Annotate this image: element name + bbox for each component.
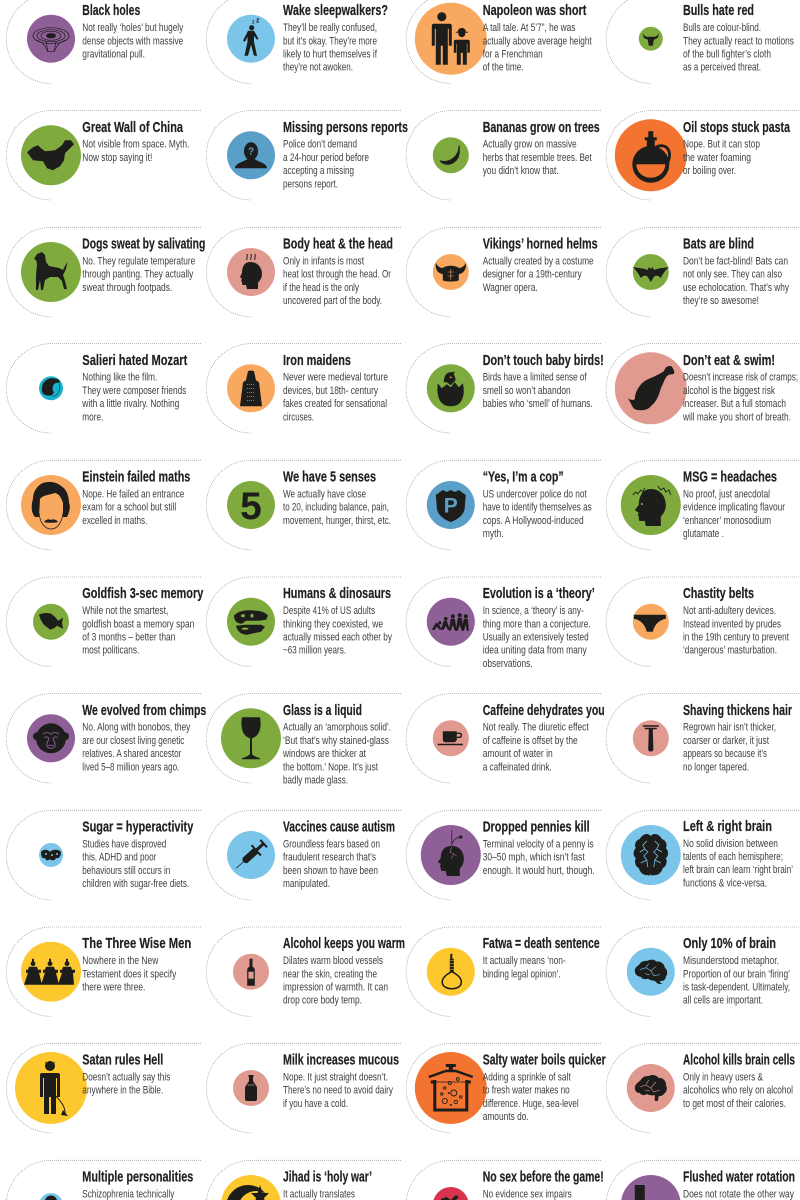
text block: glutamate .	[683, 528, 724, 540]
icon: milk bottle	[233, 1070, 269, 1106]
icon: faces	[39, 1193, 63, 1200]
text block: They’ll be really confused,	[283, 22, 377, 34]
icon: syringe	[227, 831, 275, 879]
icon: sleepwalker: z	[256, 18, 260, 25]
text block: Groundless fears based on	[283, 838, 380, 850]
text block: excelled in maths.	[82, 515, 147, 527]
title: Evolution is a ‘theory’	[483, 586, 595, 602]
text block: Testament does it specify	[82, 968, 177, 980]
title: The Three Wise Men	[82, 936, 191, 952]
card: Shaving thickens hair	[606, 694, 800, 783]
card: MSG = headaches	[606, 460, 800, 550]
icon: Mozart wig	[39, 376, 63, 400]
icon: three wise men	[21, 942, 81, 1002]
text block: babies who ‘smell’ of humans.	[483, 398, 593, 410]
icon: sleepwalker	[227, 15, 275, 63]
text block: this. ADHD and poor	[82, 852, 157, 864]
icon: chicken leg	[615, 352, 687, 424]
text block: accepting a missing	[283, 165, 354, 177]
title: Goldfish 3-sec memory	[82, 586, 204, 602]
text block: to 20, including balance, pain,	[283, 502, 389, 514]
text block: binding legal opinion’.	[483, 968, 561, 980]
text block	[683, 255, 789, 307]
text block	[483, 488, 592, 540]
text block: ‘But that’s why stained-glass	[283, 735, 389, 747]
text block: persons report.	[283, 178, 338, 190]
text block: In science, a ‘theory’ is any-	[483, 605, 584, 617]
title: Fatwa = death sentence	[483, 936, 600, 952]
card: Great Wall of China	[6, 111, 201, 200]
text block: impression of warmth. It can	[283, 982, 388, 994]
title: Napoleon was short	[483, 3, 586, 19]
icon: no sex	[433, 1187, 469, 1200]
text block: most politicans.	[82, 645, 139, 657]
card: Dogs sweat by salivating	[6, 227, 205, 317]
icon: wine glass	[221, 708, 281, 768]
text block: badly made glass.	[283, 774, 348, 786]
icon: toilet	[621, 1175, 681, 1200]
text block	[82, 372, 187, 423]
text block: thinking they coexisted, we	[283, 618, 383, 630]
text block: coarser or darker, it just	[683, 735, 769, 747]
text block: more.	[82, 411, 103, 423]
text block: children with sugar-free diets.	[82, 878, 189, 890]
card: The Three Wise Men	[6, 927, 201, 1016]
card: Iron maidens	[206, 344, 401, 433]
text block: enough. It would hurt, though.	[483, 865, 595, 877]
text block: difference. Huge, sea-level	[483, 1098, 579, 1110]
text block: No proof, just anecdotal	[683, 488, 770, 500]
title: Bats are blind	[683, 236, 754, 252]
card: Vikings’ horned helms	[406, 227, 601, 317]
text block	[683, 1071, 793, 1110]
icon: crescent and star	[221, 1175, 281, 1200]
title: “Yes, I’m a cop”	[483, 470, 564, 486]
icon: wine bottle	[233, 954, 269, 990]
icon: oil jug	[615, 119, 687, 191]
text block: have to identify themselves as	[483, 502, 592, 514]
icon: black hole	[27, 15, 75, 63]
text block: herbs that resemble trees. Bet	[483, 152, 592, 164]
card: Salieri hated Mozart	[6, 344, 201, 433]
icon: devil	[15, 1052, 87, 1124]
card: Chastity belts	[606, 577, 800, 666]
icon: damaged brain	[627, 1064, 675, 1112]
text block: gravitational pull.	[82, 48, 145, 60]
title: Iron maidens	[283, 353, 351, 369]
text block: Usually an extensively tested	[483, 632, 589, 644]
title: Black holes	[82, 3, 140, 19]
text block: for a Frenchman	[483, 48, 543, 60]
text block: Not really ‘holes’ but hugely	[82, 22, 184, 34]
title: Left & right brain	[683, 819, 772, 835]
icon: numeral five: 5	[240, 485, 262, 528]
icon: iron maiden	[227, 364, 275, 412]
title: Satan rules Hell	[82, 1052, 163, 1068]
icon: penny hitting head	[421, 825, 481, 885]
text block: as a perceived threat.	[683, 62, 761, 74]
title: Missing persons reports	[283, 120, 408, 136]
text block	[683, 139, 760, 177]
text block: 30–50 mph, which isn’t fast	[483, 852, 585, 864]
text block: fakes created for sensational	[283, 398, 387, 410]
card: No sex before the game!	[406, 1160, 604, 1200]
card: Sugar = hyperactivity	[6, 810, 201, 900]
card: Left & right brain	[606, 810, 800, 900]
text block: anywhere in the Bible.	[82, 1085, 163, 1097]
icon: man and short Napoleon	[415, 3, 487, 75]
icon: Einstein	[21, 475, 81, 535]
icon: map of China	[21, 125, 81, 185]
text block: thing more than a conjecture.	[483, 618, 591, 630]
icon: hatching chick	[427, 364, 475, 412]
icon: chimp face	[27, 714, 75, 762]
text block: functions & vice-versa.	[683, 877, 767, 889]
text block: Nowhere in the New	[82, 955, 158, 967]
title: Alcohol keeps you warm	[283, 936, 405, 952]
text block: myth.	[483, 528, 504, 540]
card: Don’t eat & swim!	[606, 344, 800, 433]
card: Only 10% of brain	[606, 927, 800, 1016]
text block: dense objects with massive	[82, 35, 183, 47]
text block: behaviours still occurs in	[82, 865, 170, 877]
title: Dropped pennies kill	[483, 820, 590, 836]
text block	[483, 255, 594, 294]
text block: likely to hurt themselves if	[283, 48, 378, 60]
text block: Nothing like the film.	[82, 372, 157, 384]
card: Dropped pennies kill	[406, 810, 601, 900]
text block: sweat through footpads.	[82, 282, 172, 294]
icon: T-rex skull	[227, 598, 275, 646]
icon: unknown person	[227, 131, 275, 179]
card: Bananas grow on trees	[406, 111, 601, 200]
text block: smell so won’t abandon	[483, 385, 571, 397]
card: Milk increases mucous	[206, 1043, 401, 1133]
text block: Not really. The diuretic effect	[483, 722, 589, 734]
text block: exam for a school but still	[82, 502, 176, 514]
text block	[82, 255, 195, 294]
icon: numeral five	[227, 481, 275, 529]
icon: banana	[433, 137, 469, 173]
text block: Now stop saying it!	[82, 152, 152, 164]
text block: or boiling over.	[683, 165, 736, 177]
text block	[283, 372, 388, 423]
text block: Nope. He failed an entrance	[82, 488, 184, 500]
text block: goldfish boast a memory span	[82, 618, 194, 630]
text block	[283, 255, 391, 307]
card: Alcohol keeps you warm	[206, 927, 405, 1016]
text block	[683, 955, 790, 1007]
text block: Wagner opera.	[483, 282, 538, 294]
icon: goldfish	[33, 604, 69, 640]
icon: coffee cup	[433, 720, 469, 756]
text block: Bulls are colour-blind.	[683, 22, 761, 34]
icon: boiling pot	[415, 1052, 487, 1124]
text block	[82, 488, 184, 527]
text block	[483, 372, 593, 410]
title: We have 5 senses	[283, 470, 376, 486]
icon: brain top view	[621, 825, 681, 885]
text block: Never were medieval torture	[283, 372, 388, 384]
card: Body heat & the head	[206, 227, 401, 317]
icon: march of progress	[427, 598, 475, 646]
text block: There’s no need to avoid dairy	[283, 1085, 393, 1097]
text block	[683, 488, 785, 540]
text block: Not visible from space. Myth.	[82, 139, 189, 151]
icon: sweets	[39, 843, 63, 867]
title: Caffeine dehydrates you	[483, 703, 605, 719]
card: Multiple personalities	[6, 1160, 201, 1200]
text block: We actually have close	[283, 488, 366, 500]
text block: No. Along with bonobos, they	[82, 722, 191, 734]
text block: Only in heavy users &	[683, 1071, 763, 1083]
text block: to fresh water makes no	[483, 1085, 570, 1097]
text block	[483, 139, 592, 177]
text block: of the time.	[483, 62, 524, 74]
text block: circuses.	[283, 411, 314, 423]
card: Satan rules Hell	[6, 1043, 201, 1133]
text block: Doesn’t actually say this	[82, 1071, 171, 1083]
icon: police badge	[427, 481, 475, 529]
text block: a caffeinated drink.	[483, 761, 552, 773]
card: Salty water boils quicker	[406, 1043, 606, 1133]
text block: A tall tale. At 5’7”, he was	[483, 22, 576, 34]
text block: Adding a sprinkle of salt	[483, 1071, 571, 1083]
card: Evolution is a ‘theory’	[406, 577, 601, 670]
text block: idea uniting data from many	[483, 645, 587, 657]
title: Humans & dinosaurs	[283, 586, 391, 602]
card: Glass is a liquid	[206, 694, 401, 786]
text block: While not the smartest,	[82, 605, 168, 617]
text block	[483, 1071, 579, 1123]
card: Jihad is ‘holy war’	[206, 1160, 401, 1200]
title: Salieri hated Mozart	[82, 353, 187, 369]
card: Wake sleepwalkers?	[206, 0, 401, 83]
title: Glass is a liquid	[283, 703, 362, 719]
text block: windows are thicker at	[282, 748, 366, 760]
text block: ‘enhancer’ monosodium	[683, 515, 771, 527]
text block	[483, 722, 589, 773]
text block: No. They regulate temperature	[82, 255, 195, 267]
icon: safety razor	[633, 720, 669, 756]
text block: but it’s okay. They’re more	[283, 35, 377, 47]
text block: no longer tapered.	[683, 761, 749, 773]
text block: if you have a cold.	[283, 1098, 348, 1110]
card: Oil stops stuck pasta	[606, 111, 800, 200]
text block: Actually grow on massive	[483, 139, 577, 151]
text block: of the bull fighter’s cloth	[683, 48, 771, 60]
text block	[683, 605, 789, 657]
text block: of caffeine is offset by the	[483, 735, 578, 747]
title: No sex before the game!	[483, 1170, 604, 1186]
text block	[82, 1071, 171, 1097]
card: Vaccines cause autism	[206, 810, 401, 900]
card: Bats are blind	[606, 227, 800, 317]
text block: a 24-hour period before	[283, 152, 369, 164]
text block	[682, 372, 798, 423]
title: We evolved from chimps	[82, 703, 206, 719]
card: Missing persons reports	[206, 111, 408, 200]
text block: fraudulent research that’s	[283, 852, 376, 864]
title: Bulls hate red	[683, 3, 754, 19]
text block	[283, 955, 388, 1007]
text block	[82, 838, 189, 890]
icon: underpants	[633, 604, 669, 640]
text block: are our closest living genetic	[82, 735, 185, 747]
text block: you didn’t know that.	[483, 165, 559, 177]
icon: bat	[633, 254, 669, 290]
text block: cops. A Hollywood-induced	[483, 515, 584, 527]
text block: there were three.	[82, 982, 145, 994]
text block: Actually an ‘amorphous solid’.	[283, 722, 391, 734]
text block	[483, 22, 592, 74]
card: Alcohol kills brain cells	[606, 1043, 800, 1133]
card: Flushed water rotation	[606, 1160, 800, 1200]
text block: the bottom.’ Nope. It’s just	[283, 761, 378, 773]
text block: through panting. They actually	[82, 269, 194, 281]
card: Goldfish 3-sec memory	[6, 577, 204, 666]
icon: aching head	[621, 475, 681, 535]
text block: amount of water in	[483, 748, 553, 760]
text block: actually above average height	[483, 35, 592, 47]
text block: Dilates warm blood vessels	[283, 955, 383, 967]
title: Multiple personalities	[82, 1170, 193, 1186]
title: Great Wall of China	[82, 120, 184, 136]
card: Black holes	[6, 0, 201, 83]
title: Jihad is ‘holy war’	[283, 1170, 372, 1186]
text block	[283, 22, 378, 74]
text block	[283, 1071, 393, 1110]
text block: Actually created by a costume	[483, 255, 594, 267]
text block: uncovered part of the body.	[283, 295, 382, 307]
title: Dogs sweat by salivating	[82, 236, 205, 252]
card: “Yes, I’m a cop”	[406, 460, 601, 550]
title: Sugar = hyperactivity	[82, 820, 194, 836]
icon: brain side view	[627, 948, 675, 996]
text block: Police don’t demand	[283, 139, 357, 151]
text block: all cells are important.	[683, 995, 763, 1007]
title: Salty water boils quicker	[483, 1052, 606, 1068]
card: Napoleon was short	[406, 0, 601, 83]
text block: observations.	[483, 658, 533, 670]
title: Bananas grow on trees	[483, 120, 600, 136]
text block: devices, but 18th- century	[283, 385, 378, 397]
title: Einstein failed maths	[82, 470, 190, 486]
text block	[82, 22, 184, 61]
text block	[82, 722, 191, 773]
title: Body heat & the head	[283, 236, 393, 252]
text block: movement, hunger, thirst, etc.	[283, 515, 391, 527]
text block	[483, 605, 591, 670]
title: Milk increases mucous	[283, 1052, 399, 1068]
text block	[283, 488, 391, 527]
card: We evolved from chimps	[6, 694, 206, 783]
text block: Birds have a limited sense of	[483, 372, 587, 384]
icon: dog	[21, 242, 81, 302]
text block: drop core body temp.	[283, 995, 362, 1007]
text block	[283, 139, 369, 190]
title: Wake sleepwalkers?	[283, 3, 388, 19]
text block: relatives. A shared ancestor	[82, 748, 182, 760]
card: Caffeine dehydrates you	[406, 694, 605, 783]
text block	[683, 722, 776, 773]
text block: Nope. But it can stop	[683, 139, 760, 151]
icon: sleepwalker: z	[252, 20, 255, 26]
text block: Only in infants is most	[283, 255, 364, 267]
text block: been shown to have been	[283, 865, 378, 877]
text block: designer for a 19th-century	[483, 269, 582, 281]
text block	[483, 838, 595, 877]
text block: appears so because it’s	[683, 748, 767, 760]
text block: lived 5–8 million years ago.	[82, 761, 179, 773]
text block: of 3 months – better than	[82, 632, 175, 644]
icon: police badge: P	[444, 494, 458, 518]
text block: It actually means ‘non-	[483, 955, 566, 967]
card: Humans & dinosaurs	[206, 577, 401, 666]
text block: Despite 41% of US adults	[283, 605, 375, 617]
text block: Studies have disproved	[82, 838, 166, 850]
icon: unknown person: ?	[248, 146, 254, 157]
text block: they’re so awesome!	[683, 295, 759, 307]
text block: ~63 million years.	[283, 645, 346, 657]
text block	[683, 22, 794, 74]
text block	[483, 955, 566, 980]
text block	[82, 605, 194, 657]
text block: with a little rivalry. Nothing	[82, 398, 179, 410]
text block	[82, 955, 177, 994]
text block	[283, 838, 380, 890]
text block: US undercover police do not	[483, 488, 587, 500]
text block: if the head is the only	[283, 282, 359, 294]
text block	[282, 722, 391, 786]
card: Don’t touch baby birds!	[406, 344, 604, 433]
title: Chastity belts	[683, 586, 754, 602]
icon: horned helmet	[433, 254, 469, 290]
text block: near the skin, creating the	[283, 968, 377, 980]
text block: amounts do.	[483, 1111, 529, 1123]
card: Einstein failed maths	[6, 460, 201, 550]
title: Vaccines cause autism	[283, 820, 395, 836]
text block	[283, 605, 392, 657]
icon: head radiating heat	[227, 248, 275, 296]
text block: manipulated.	[283, 878, 330, 890]
card: We have 5 senses	[206, 460, 401, 550]
icon: noose	[427, 948, 475, 996]
text block: they’re not awoken.	[283, 62, 353, 74]
title: Don’t touch baby birds!	[483, 353, 604, 369]
text block: Nope. It just straight doesn’t.	[283, 1071, 388, 1083]
text block	[683, 838, 793, 889]
text block: They were composer friends	[82, 385, 187, 397]
text block: the water foaming	[683, 152, 751, 164]
text block: Terminal velocity of a penny is	[483, 838, 594, 850]
icon: bull	[639, 27, 663, 51]
text block: actually missed each other by	[283, 632, 392, 644]
title: Vikings’ horned helms	[483, 236, 598, 252]
card: Bulls hate red	[606, 0, 800, 83]
text block: heat lost through the head. Or	[283, 269, 391, 281]
text block	[82, 139, 189, 164]
card: Fatwa = death sentence	[406, 927, 601, 1016]
